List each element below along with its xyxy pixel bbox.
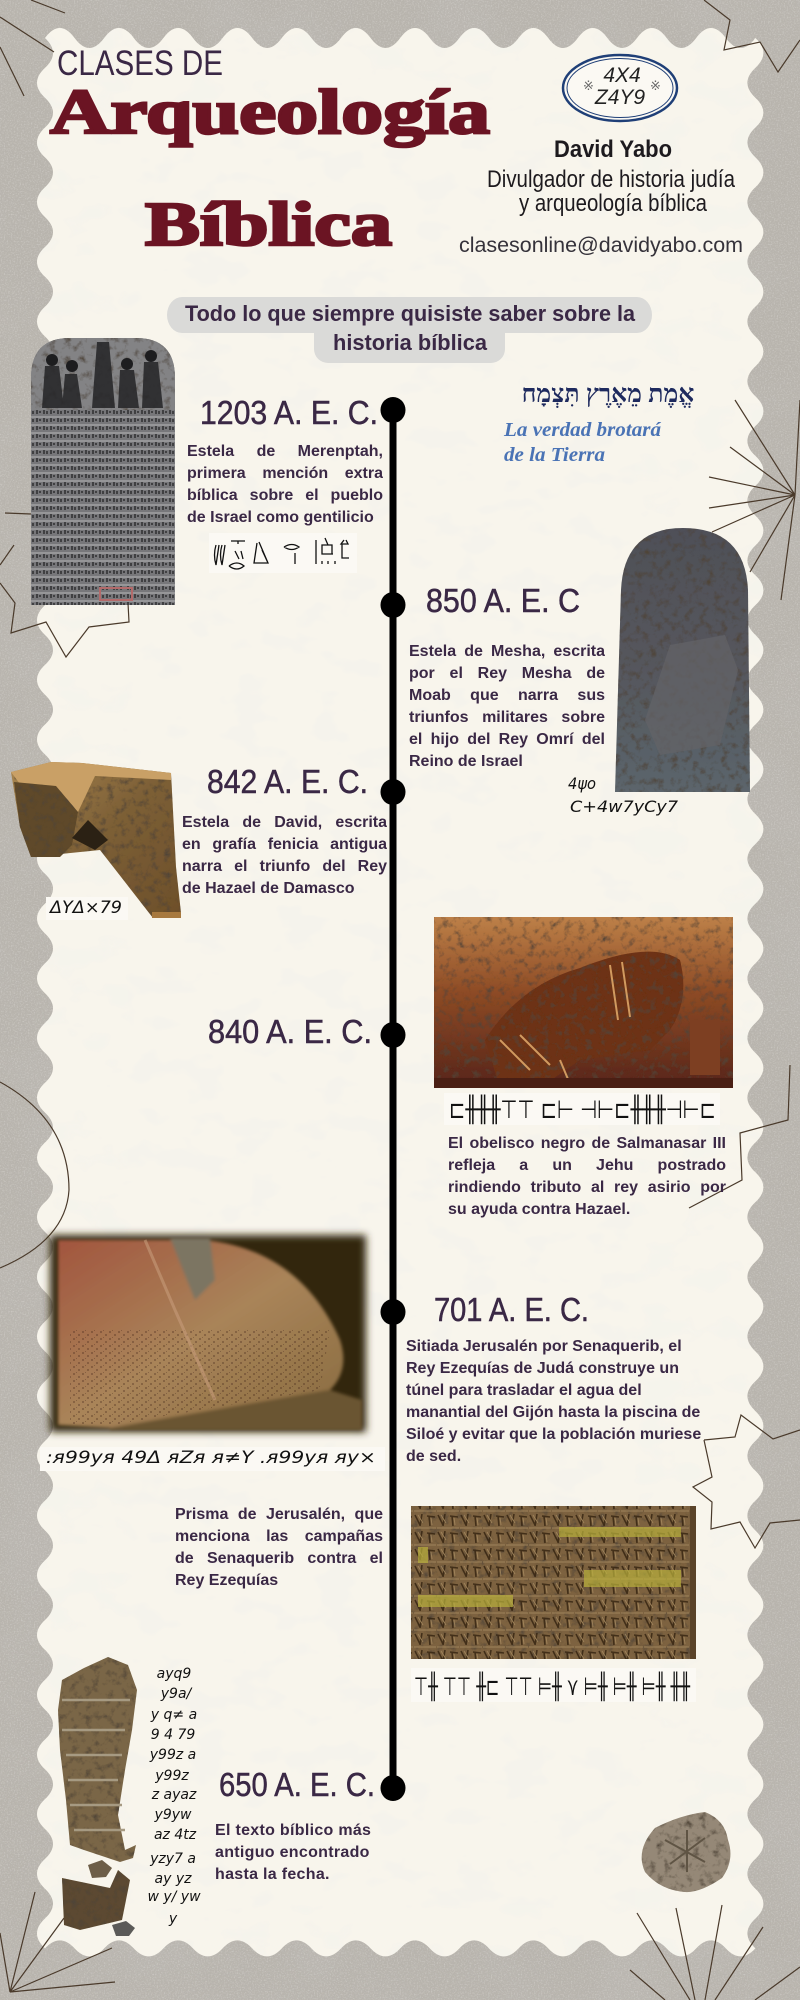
description bbox=[182, 812, 387, 902]
entry: 1203 bbox=[31, 338, 383, 605]
description: primera mención extra bbox=[187, 464, 383, 482]
description: Estela de David, escrita bbox=[182, 814, 387, 830]
paleo-hebrew column: y bbox=[168, 1911, 178, 1927]
phoenician inscription: 4ψo bbox=[568, 774, 596, 793]
paleo-hebrew column: ayq9 bbox=[157, 1666, 191, 1682]
description: El texto bíblico más bbox=[215, 1822, 371, 1838]
description: Sitiada Jerusalén por Senaquerib, el bbox=[406, 1338, 682, 1354]
description: rindiendo tributo al rey asirio por bbox=[448, 1178, 726, 1196]
date: 650 A. E. C. bbox=[219, 1766, 375, 1803]
spanish quote: La verdad brotará bbox=[503, 419, 662, 441]
icon: logo seal: 4X4 bbox=[603, 64, 641, 87]
title bbox=[50, 44, 490, 259]
description bbox=[409, 640, 605, 776]
description: Prisma de Jerusalén, que bbox=[175, 1506, 383, 1522]
paleo-hebrew column: y99z a bbox=[149, 1747, 196, 1763]
paleo-hebrew column bbox=[147, 1666, 201, 1927]
description: triunfos militares sobre bbox=[409, 708, 605, 726]
description bbox=[215, 1820, 385, 1890]
paleo-hebrew column: yzy7 a bbox=[149, 1851, 196, 1867]
description: Rey Ezequías bbox=[175, 1572, 278, 1588]
author role: Divulgador de historia judía bbox=[487, 166, 736, 193]
author block bbox=[459, 136, 743, 257]
description bbox=[187, 440, 383, 530]
image: clay seal bbox=[642, 1812, 730, 1892]
description bbox=[448, 1132, 726, 1222]
description: de Hazael de Damasco bbox=[182, 880, 355, 896]
date: 842 A. E. C. bbox=[207, 763, 368, 800]
hebrew verse callout: de la Tierra bbox=[504, 444, 605, 466]
image: black obelisk relief bbox=[434, 917, 733, 1088]
icon: logo seal: ※ bbox=[650, 78, 661, 93]
paleo-hebrew column: ay yz bbox=[155, 1871, 192, 1887]
description: antiguo encontrado bbox=[215, 1844, 370, 1860]
paleo-hebrew column: 9 4 79 bbox=[151, 1727, 195, 1743]
description: Rey Ezequías de Judá construye un bbox=[406, 1360, 679, 1376]
description: menciona las campañas bbox=[175, 1528, 383, 1544]
hebrew verse callout bbox=[503, 381, 694, 466]
paleo-hebrew column: w y/ yw bbox=[147, 1889, 201, 1905]
description: Estela de Merenptah, bbox=[187, 442, 383, 460]
icon: logo seal: Z4Y9 bbox=[594, 86, 645, 109]
timeline bbox=[380, 397, 406, 1801]
description: Moab que narra sus bbox=[409, 686, 605, 704]
author name: David Yabo bbox=[554, 136, 672, 163]
image: Siloam inscription bbox=[50, 1235, 366, 1432]
description: de Senaquerib contra el bbox=[175, 1550, 383, 1566]
description: narra el triunfo del Rey bbox=[182, 858, 387, 874]
entry: 650 bbox=[58, 1657, 385, 1936]
date: 1203 A. E. C. bbox=[200, 394, 378, 431]
description bbox=[406, 1336, 716, 1470]
description: refleja a un Jehu postrado bbox=[448, 1156, 726, 1174]
cuneiform inscription: ⊏╫╫╫⊤⊤ ⊏⊢ ⊣⊢⊏╫╫╫⊣⊢⊏ bbox=[449, 1094, 716, 1125]
date: 840 A. E. C. bbox=[208, 1013, 372, 1050]
phoenician inscription bbox=[568, 774, 679, 816]
description: Estela de Mesha, escrita bbox=[409, 642, 605, 660]
subtitle pill: historia bíblica bbox=[333, 330, 488, 355]
description: de sed. bbox=[406, 1448, 461, 1464]
paleo-hebrew column: y99z bbox=[154, 1768, 189, 1784]
icon: logo seal bbox=[563, 55, 677, 121]
description: Reino de Israel bbox=[409, 752, 523, 770]
description: de Israel como gentilicio bbox=[187, 508, 374, 526]
paleo-hebrew column: y9a/ bbox=[160, 1686, 193, 1702]
heading: bíblica: Bíblica bbox=[145, 191, 392, 259]
entry: 840 bbox=[208, 917, 733, 1222]
description: el hijo del Rey Omrí del bbox=[409, 730, 605, 748]
description bbox=[175, 1504, 383, 1594]
cuneiform inscription bbox=[411, 1668, 696, 1702]
description: El obelisco negro de Salmanasar III bbox=[448, 1134, 726, 1152]
paleo-hebrew column: y q≠ a bbox=[150, 1707, 197, 1723]
entry: 701 bbox=[40, 1235, 716, 1471]
description: Siloé y evitar que la población muriese bbox=[406, 1426, 701, 1442]
heading: clases de: CLASES DE bbox=[57, 44, 223, 83]
date: 701 A. E. C. bbox=[434, 1291, 589, 1328]
paleo-hebrew inscription bbox=[40, 1447, 385, 1471]
author role line 2: y arqueología bíblica bbox=[519, 190, 708, 217]
paleo-hebrew column: y9yw bbox=[154, 1807, 192, 1823]
description: bíblica sobre el pueblo bbox=[187, 486, 383, 504]
paleo-hebrew column: z ayaz bbox=[151, 1787, 197, 1803]
subtitle pill bbox=[167, 297, 652, 363]
description: en grafía fenicia antigua bbox=[182, 836, 387, 852]
paleo-hebrew inscription: :ᴙ99yᴙ 49Δ ᴙZᴙ ᴙ≠Y .ᴙ99yᴙ ᴙy× bbox=[46, 1448, 376, 1468]
heading: arqueología: Arqueología bbox=[50, 76, 490, 147]
image: Jerusalem prism bbox=[411, 1506, 696, 1659]
description: hasta la fecha. bbox=[215, 1866, 330, 1882]
entry: 842 bbox=[11, 762, 387, 920]
description: manantial del Gijón hasta la piscina de bbox=[406, 1404, 700, 1420]
icon: logo seal: ※ bbox=[583, 78, 594, 93]
description: túnel para trasladar el agua del bbox=[406, 1382, 642, 1398]
image: Tel Dan stele bbox=[11, 762, 181, 918]
subtitle pill: Todo lo que siempre quisiste saber sobre la bbox=[185, 301, 636, 326]
image: Ketef Hinnom scroll bbox=[58, 1657, 137, 1936]
date: 850 A. E. C bbox=[426, 582, 580, 619]
description: su ayuda contra Hazael. bbox=[448, 1200, 630, 1218]
entry: prism bbox=[175, 1504, 696, 1702]
phoenician inscription: C+4w7yCy7 bbox=[570, 797, 679, 816]
entry: 850 bbox=[409, 528, 750, 816]
image: Merenptah stele bbox=[31, 338, 175, 605]
image: Mesha stele bbox=[615, 528, 750, 792]
email: clasesonline@davidyabo.com bbox=[459, 234, 743, 257]
icon: hieroglyphs bbox=[209, 533, 357, 573]
hebrew quote: אֱמֶת מֵאֶרֶץ תִּצְמָח bbox=[522, 381, 694, 408]
description: por el Rey Mesha de bbox=[409, 664, 605, 682]
phoenician label: ΔΥΔ×79 bbox=[48, 898, 122, 918]
paleo-hebrew column: az 4tz bbox=[154, 1827, 197, 1843]
